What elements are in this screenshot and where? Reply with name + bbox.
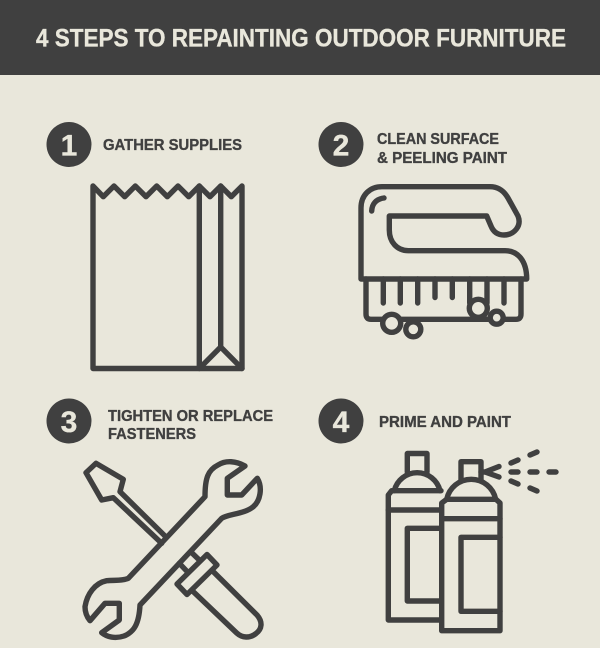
step 3 heading — [46, 398, 273, 444]
step 2 heading: & PEELING PAINT — [377, 150, 508, 167]
icon: paper bag — [93, 186, 242, 368]
title banner — [0, 0, 600, 75]
step 3 heading: TIGHTEN OR REPLACE — [108, 408, 273, 425]
icon: spray paint cans — [388, 452, 556, 631]
step 1 heading — [46, 122, 242, 167]
icon: scrub brush — [361, 187, 527, 337]
step 4 heading — [318, 398, 512, 444]
step 3 heading: 3 — [61, 406, 77, 439]
icon: crossed screwdriver and wrench — [85, 462, 261, 637]
step 2 heading: 2 — [333, 130, 349, 162]
step 2 heading: CLEAN SURFACE — [377, 131, 499, 148]
step 4 heading: 4 — [333, 406, 350, 439]
step 2 heading — [318, 122, 508, 167]
step 1 heading: 1 — [61, 130, 77, 162]
step 4 heading: PRIME AND PAINT — [379, 414, 512, 431]
step 1 heading: GATHER SUPPLIES — [103, 137, 242, 154]
step 3 heading: FASTENERS — [108, 426, 196, 443]
